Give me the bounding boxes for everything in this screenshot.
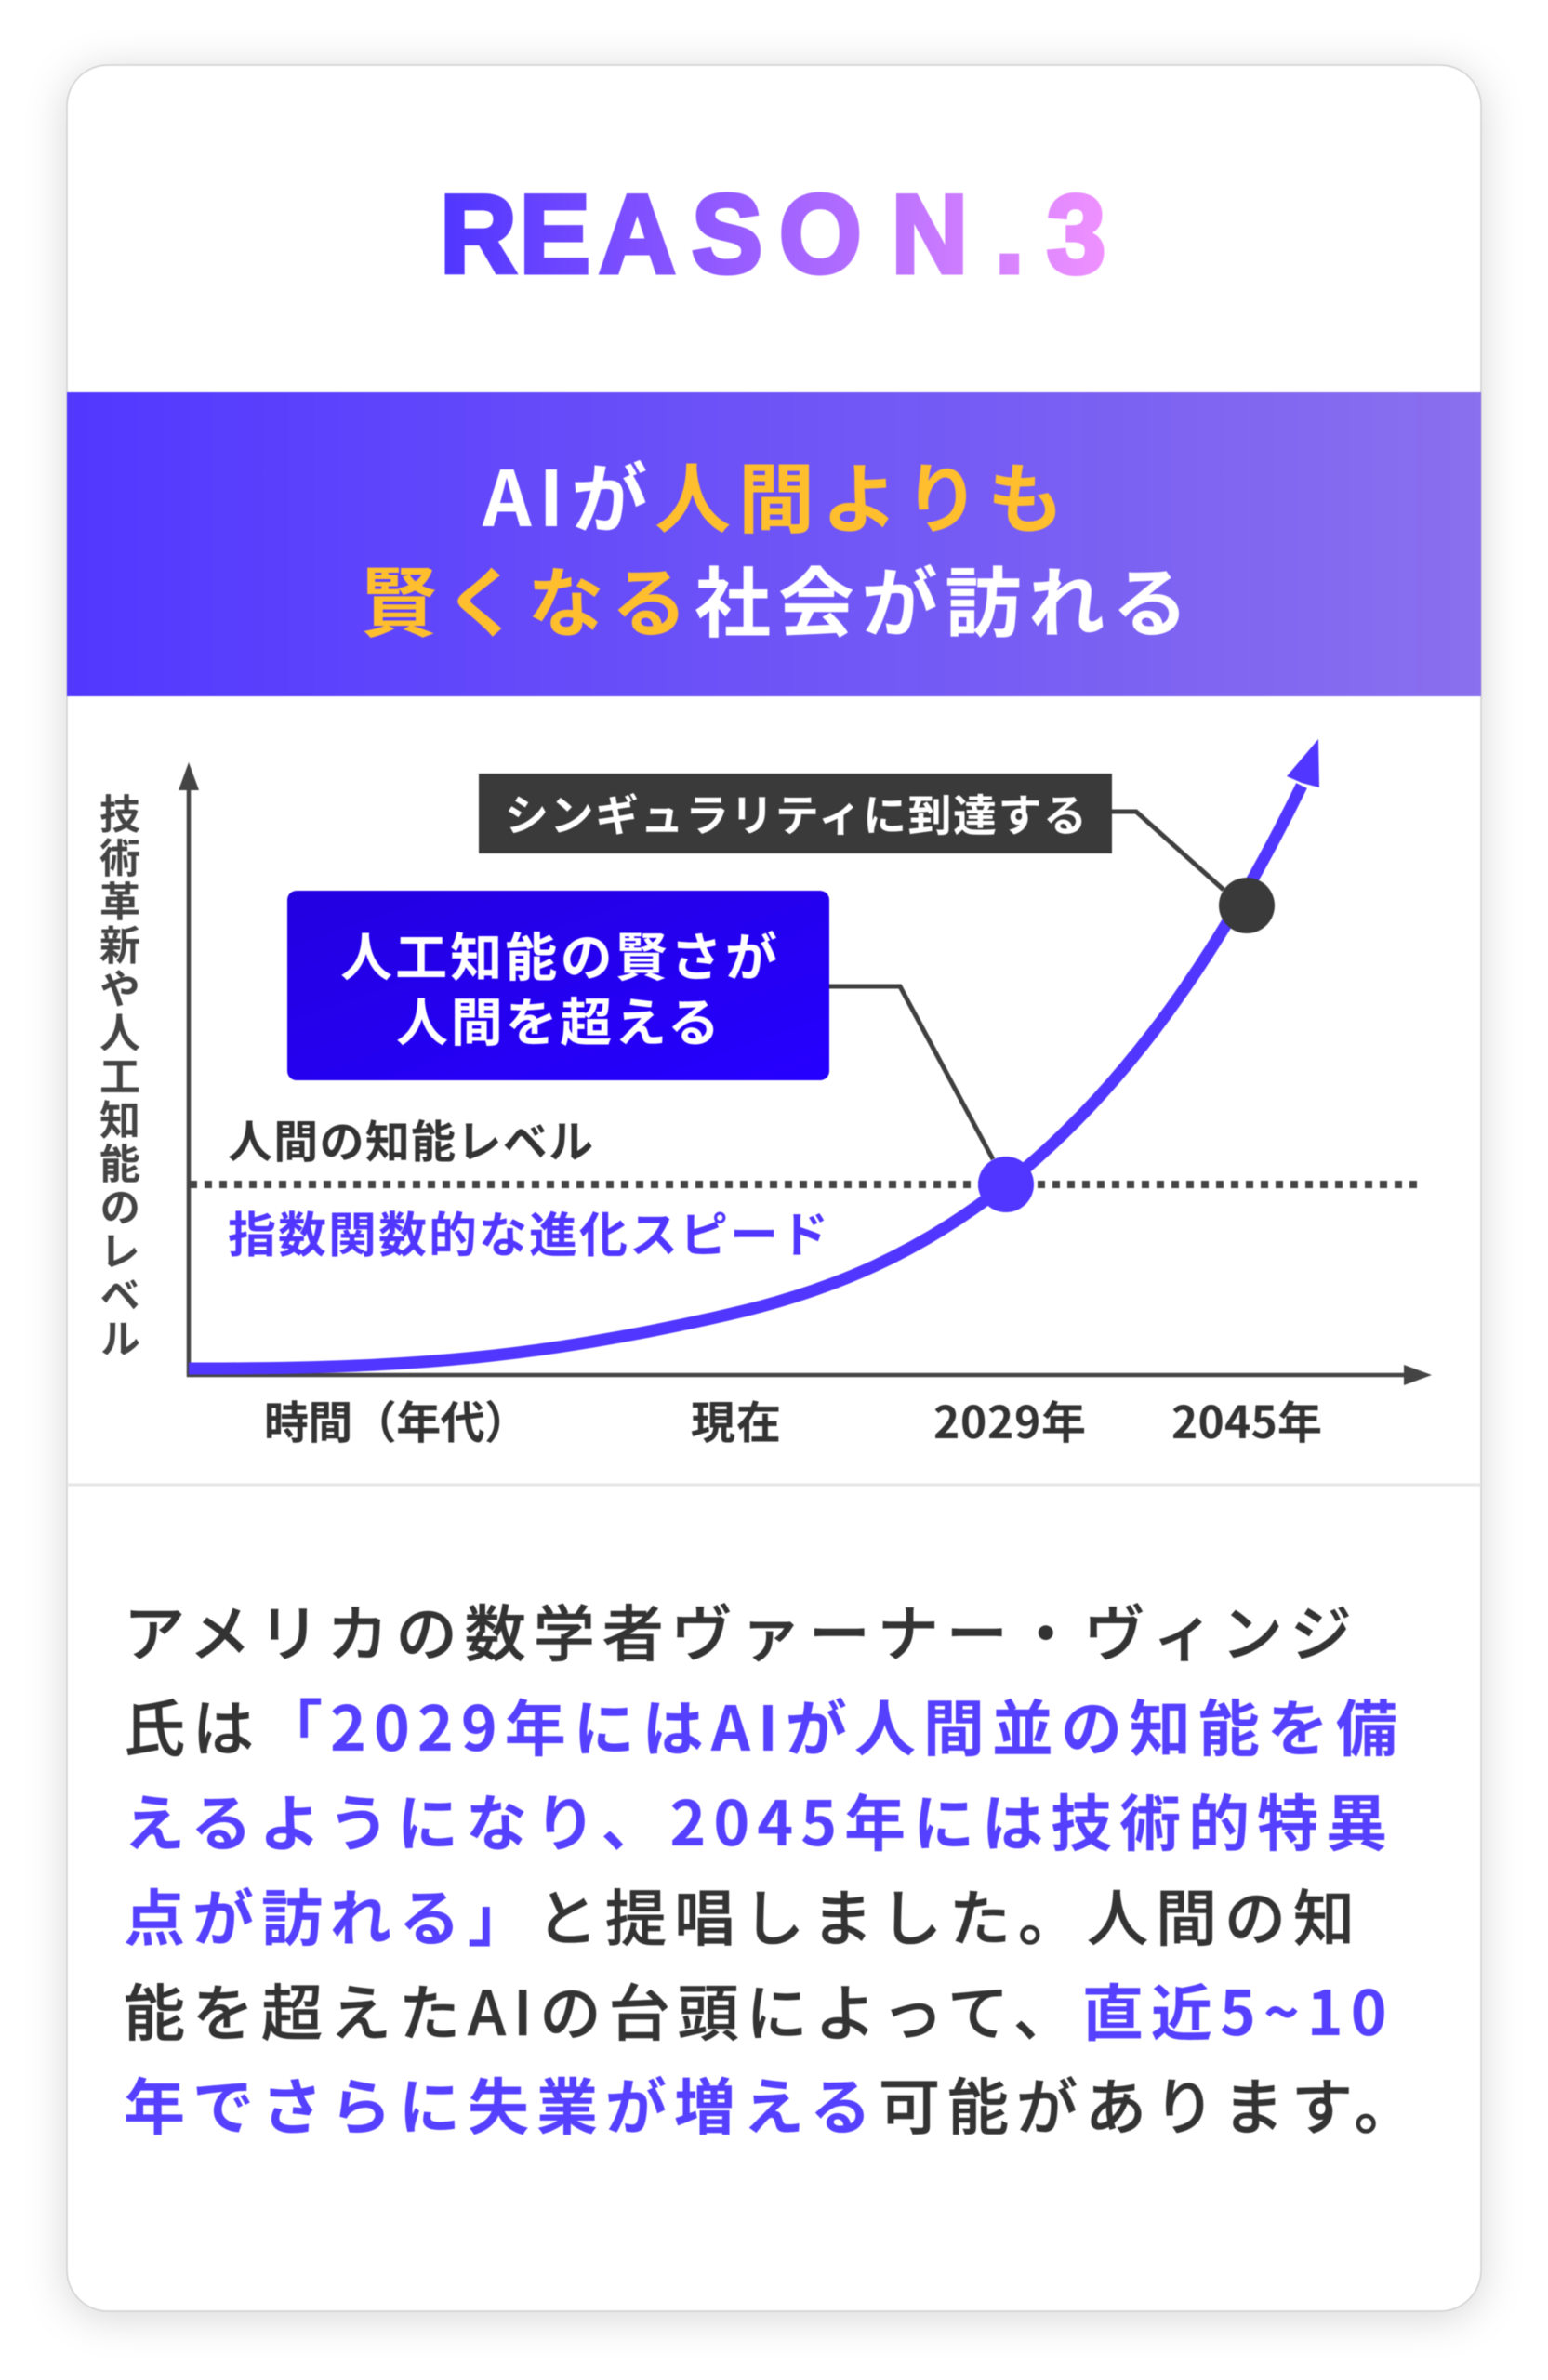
body text block: えるようになり、2045年には技術的特異 bbox=[124, 1775, 1395, 1864]
banner title line 2: 賢くなる社会が訪れる bbox=[361, 542, 1188, 653]
y axis arrow bbox=[187, 786, 191, 1377]
callout connector: AI exceeds humans bbox=[829, 986, 993, 1159]
label: exponential speed: 指数関数的な進化スピード bbox=[228, 1197, 828, 1266]
heading: REASON.3: REASON.3 bbox=[440, 171, 1105, 297]
banner title line 1: AIが人間よりも bbox=[482, 438, 1064, 549]
marker: 2045 bbox=[1219, 878, 1275, 933]
callout connector: singularity bbox=[1112, 812, 1224, 890]
callout: singularity: シンギュラリティに到達する bbox=[505, 780, 1087, 844]
title banner bbox=[67, 392, 1481, 696]
body text block: 能を超えたAIの台頭によって、直近5~10 bbox=[124, 1964, 1395, 2054]
body text block: 点が訪れる」と提唱しました。人間の知 bbox=[124, 1870, 1362, 1959]
marker: 2029 bbox=[978, 1157, 1034, 1212]
x label: time: 時間（年代） bbox=[264, 1386, 529, 1451]
exponential growth chart bbox=[90, 739, 1432, 1451]
x label: 2029: 2029年 bbox=[933, 1386, 1086, 1451]
exponential curve bbox=[189, 786, 1302, 1368]
y axis arrowhead bbox=[179, 762, 199, 790]
x label: present: 現在 bbox=[691, 1386, 781, 1451]
x axis arrow bbox=[187, 1373, 1409, 1377]
body text block: 年でさらに失業が増える可能があります。 bbox=[124, 2058, 1422, 2148]
human intelligence level dotted line bbox=[190, 1181, 1417, 1188]
x axis arrowhead bbox=[1404, 1365, 1432, 1385]
callout: AI exceeds human intelligence: 人工知能の賢さが bbox=[340, 917, 777, 992]
body text block: アメリカの数学者ヴァーナー・ヴィンジ bbox=[124, 1585, 1359, 1674]
callout: AI exceeds human intelligence bbox=[287, 891, 829, 1080]
body text block: 氏は「2029年にはAIが人間並の知能を備 bbox=[124, 1680, 1405, 1769]
label: human intelligence level: 人間の知能レベル bbox=[228, 1105, 593, 1170]
curve arrowhead bbox=[1287, 739, 1319, 787]
x label: 2045: 2045年 bbox=[1171, 1386, 1322, 1451]
body text block bbox=[124, 1585, 1422, 2148]
y axis label: 技術革新や人工知能のレベル bbox=[90, 793, 150, 1361]
callout: AI exceeds human intelligence: 人間を超える bbox=[396, 982, 720, 1057]
